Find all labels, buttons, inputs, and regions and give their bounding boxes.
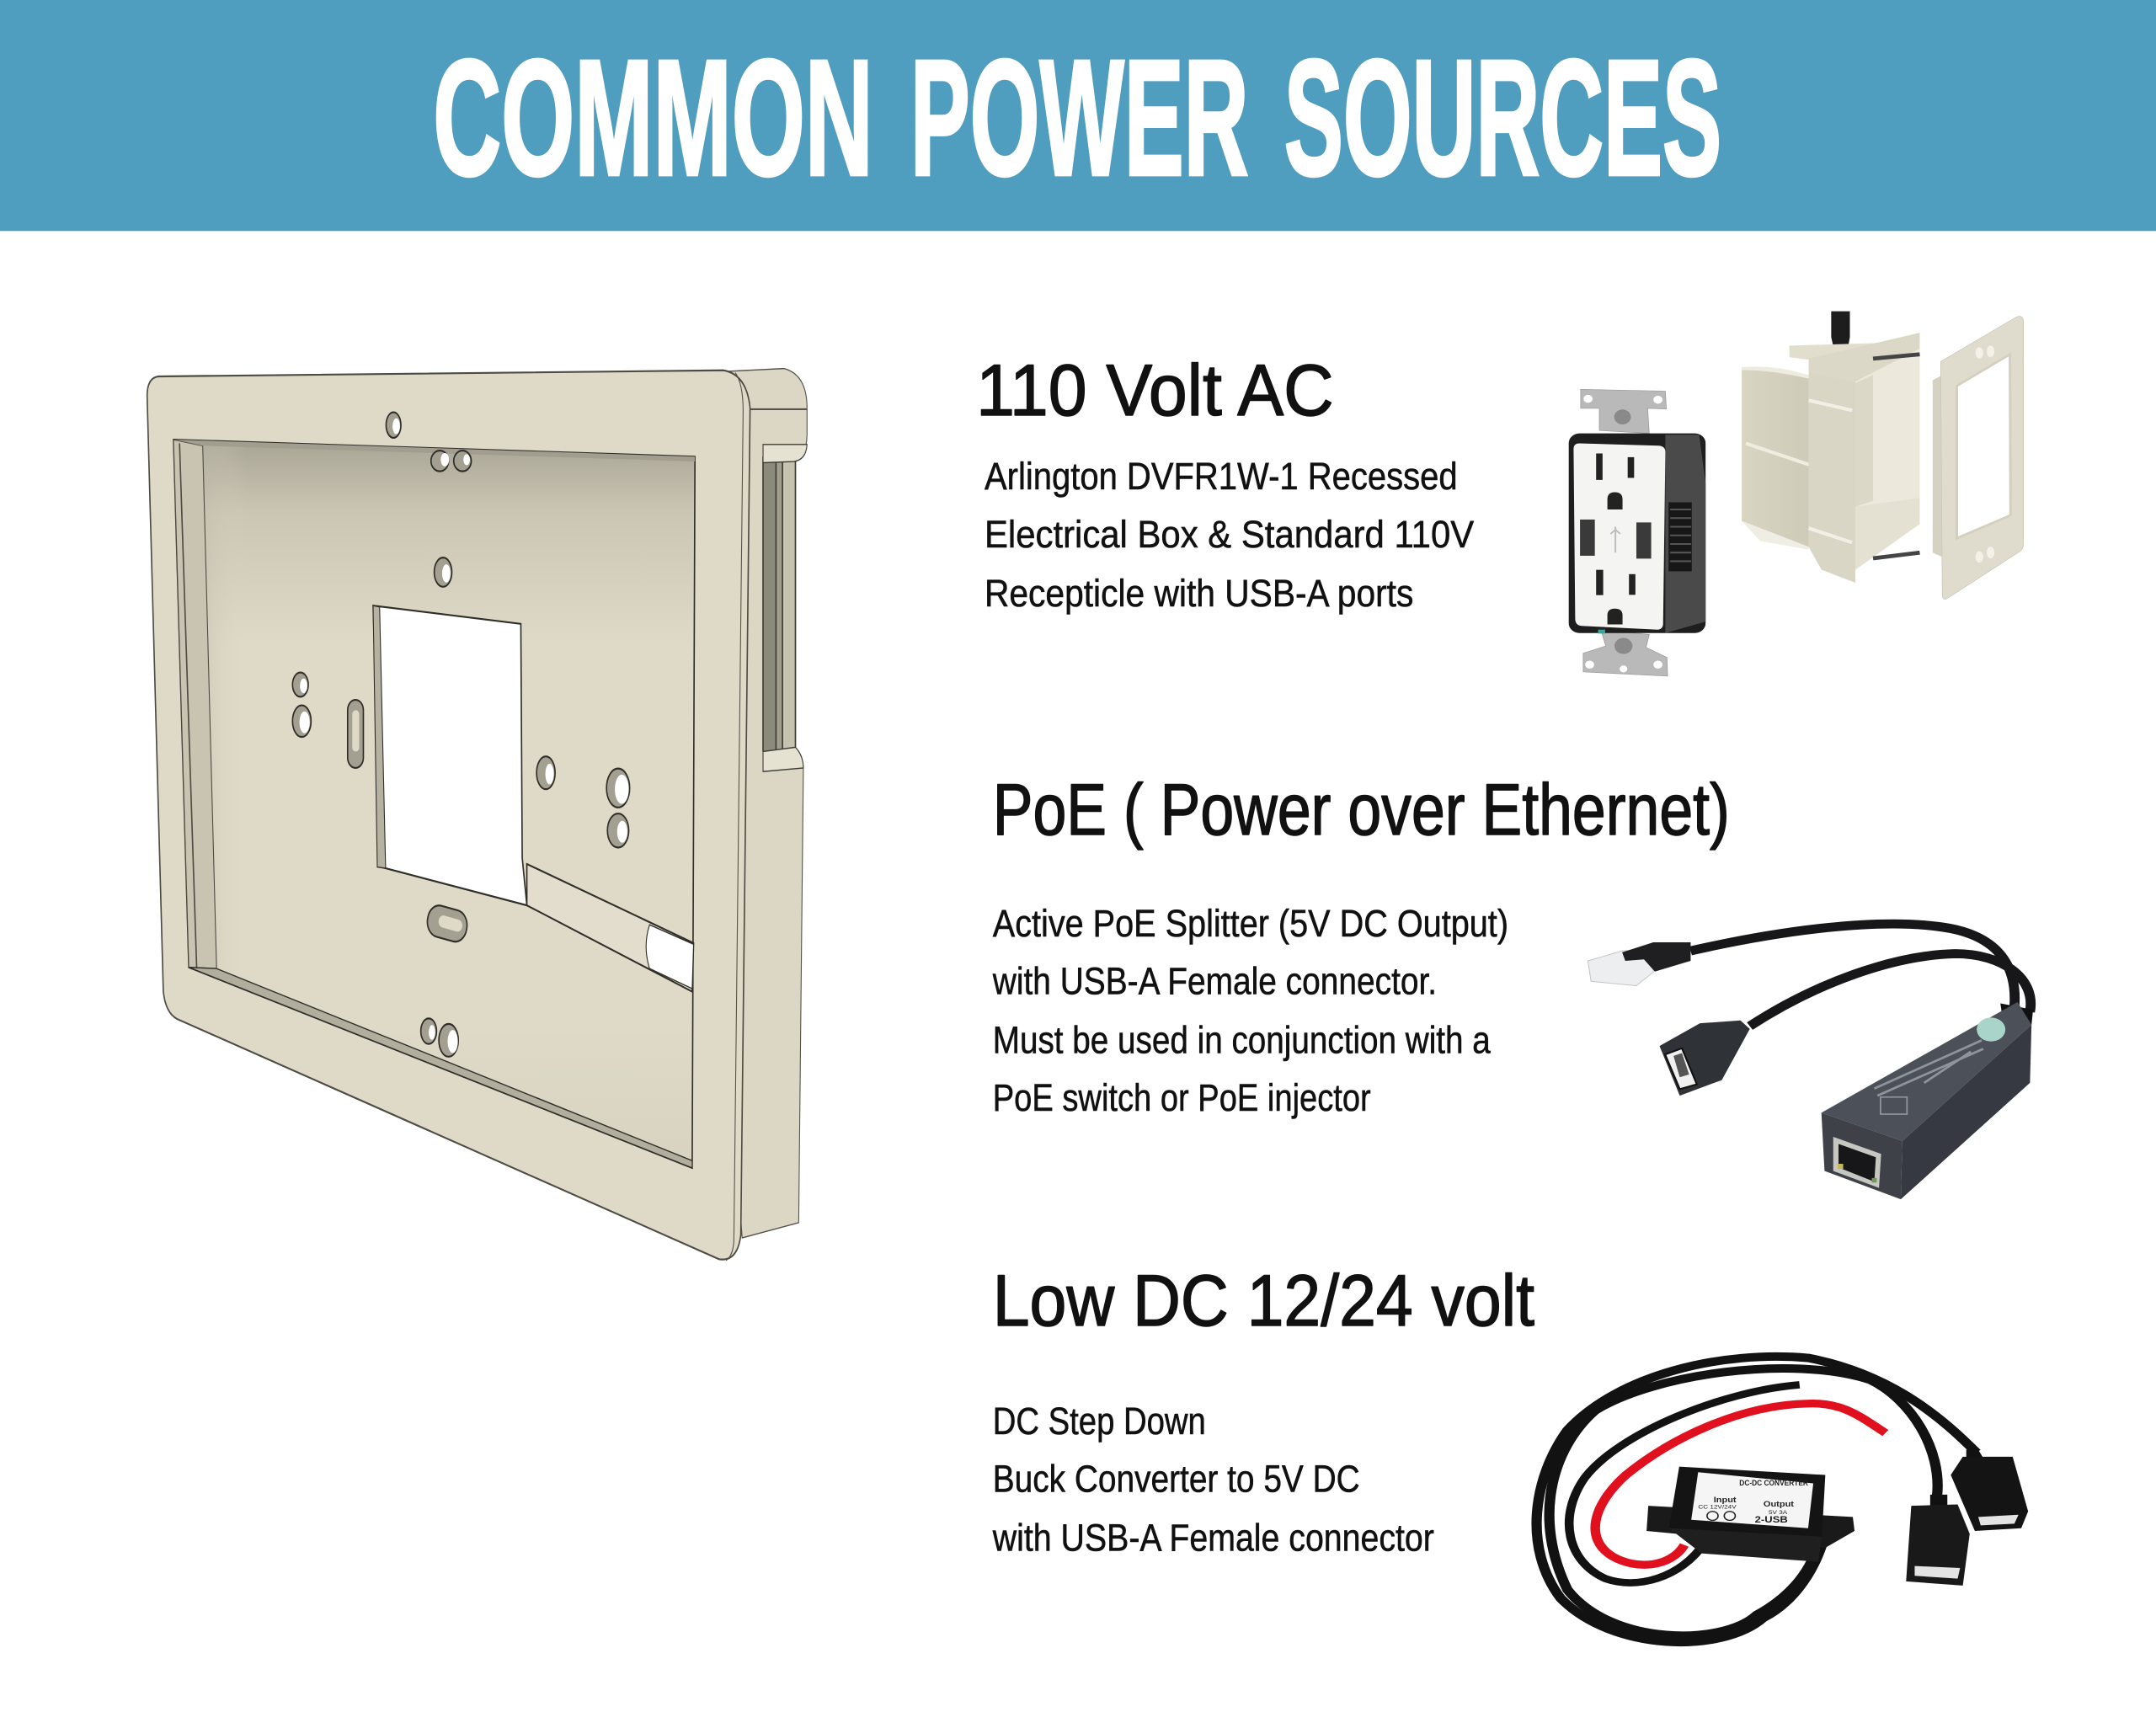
centre cutout window (373, 605, 527, 905)
description: 110 Volt AC: Electrical Box & Standard 110V (985, 513, 1475, 556)
converter module: Input (1714, 1496, 1737, 1504)
heading: 110 Volt AC: 110 Volt AC (976, 350, 1334, 431)
heading: Low DC: Low DC 12/24 volt (993, 1261, 1534, 1341)
description: Low DC: with USB-A Female connector (992, 1517, 1434, 1560)
description: Low DC: Buck Converter to 5V DC (993, 1457, 1360, 1500)
title: SOURCES (1284, 25, 1721, 210)
receptacle (1569, 389, 1705, 676)
description: 110 Volt AC (985, 455, 1475, 615)
photo: PoE splitter (1588, 924, 2033, 1199)
front bezel (147, 371, 750, 1260)
converter module: Output (1764, 1501, 1795, 1508)
module label text: DC-DC CONVERTER (1739, 1480, 1809, 1488)
description: PoE: Must be used in conjunction with a (993, 1019, 1491, 1062)
side cable slot (750, 409, 807, 771)
description: PoE: with USB-A Female connector. (992, 959, 1437, 1002)
input red wire (1595, 1404, 1886, 1565)
description: Low DC: DC Step Down (993, 1400, 1206, 1443)
title: POWER (910, 25, 1248, 210)
photo: DC buck converter (1537, 1357, 2028, 1642)
recessed back plate (173, 440, 695, 1168)
description: PoE (992, 902, 1508, 1119)
enclosure 3D render (147, 369, 807, 1261)
converter module: 2-USB (1755, 1514, 1788, 1525)
USB-A female connector (1659, 1021, 1750, 1096)
converter module: CC 12V/24V (1698, 1503, 1737, 1510)
header banner (0, 0, 2156, 231)
output cables (1537, 1357, 1977, 1642)
title: COMMON (433, 25, 873, 210)
box faceplate (1933, 316, 2024, 600)
title (433, 25, 1721, 210)
mounting holes (292, 413, 630, 1057)
input black wire (1569, 1384, 1800, 1583)
description: Low DC (992, 1400, 1434, 1560)
description: 110 Volt AC: Arlington DVFR1W-1 Recessed (985, 455, 1458, 498)
description: 110 Volt AC: Recepticle with USB-A ports (985, 572, 1413, 615)
USB-A connector rear (1951, 1450, 2028, 1531)
converter module (1646, 1467, 1854, 1562)
photo: USB receptacle and recessed box (1569, 312, 2024, 676)
cable channel with slot (527, 864, 694, 992)
RJ45 plug (1588, 942, 1690, 986)
section: PoE (992, 770, 1730, 1119)
cables (1690, 924, 2031, 1027)
heading: PoE: PoE ( Power over Ethernet) (993, 770, 1730, 851)
description: PoE: Active PoE Splitter (5V DC Output) (993, 902, 1508, 945)
splitter body (1822, 1002, 2033, 1199)
recessed box (1742, 312, 1919, 583)
enclosure side wall (719, 369, 807, 1238)
converter module: 5V 3A (1769, 1509, 1787, 1516)
section: Low DC (992, 1261, 1534, 1560)
hole highlights (300, 419, 629, 1053)
description: PoE: PoE switch or PoE injector (993, 1076, 1371, 1119)
section: 110 Volt AC (976, 350, 1475, 615)
USB-A connector front (1906, 1495, 1970, 1586)
